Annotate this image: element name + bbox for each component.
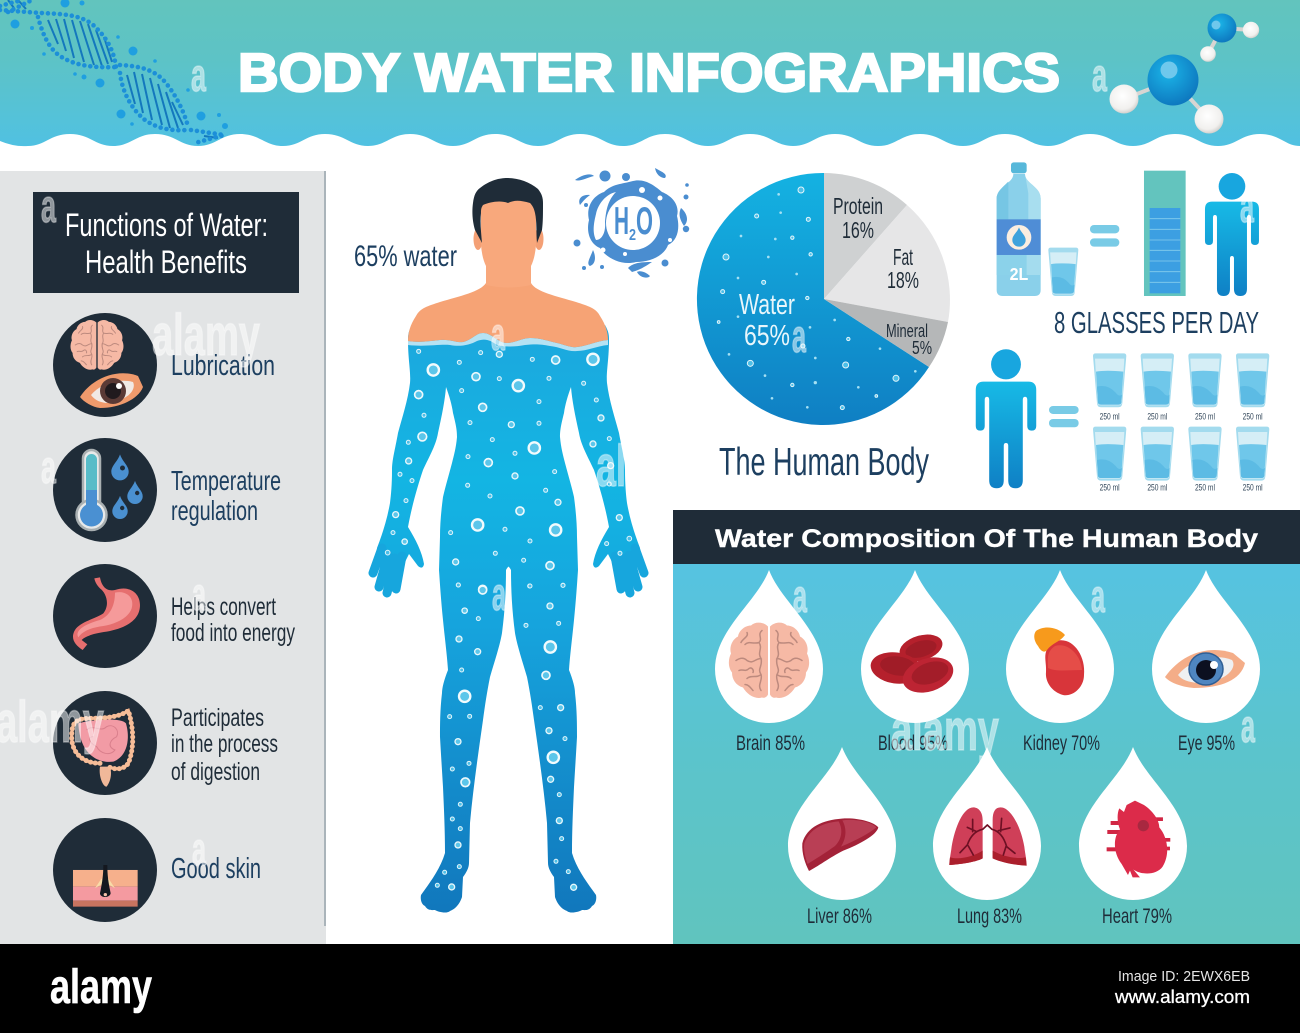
watermarks: a [191, 49, 206, 101]
organ: heart 79% [1079, 747, 1187, 928]
pie labels: Mineral [886, 321, 928, 341]
watermarks: alamy [891, 698, 999, 763]
slice: water [697, 173, 929, 425]
pie labels: Fat [893, 244, 913, 270]
daily water intake section [976, 162, 1269, 493]
header banner [0, 0, 1300, 172]
item: participates in digestion: Participates [171, 704, 264, 732]
watermarks: a [192, 568, 206, 620]
heading: functions of water [33, 192, 299, 293]
glasses grid: 250 ml x 8: 250 ml [1243, 483, 1263, 493]
glasses grid: 250 ml x 8: 250 ml [1243, 411, 1263, 421]
section header [673, 510, 1300, 564]
pie labels: 65% [744, 320, 790, 352]
item: lubrication [53, 313, 275, 417]
heading: functions of water: Health Benefits [85, 244, 247, 280]
icon: water molecule [1110, 14, 1259, 134]
organ: kidney 70% [1006, 570, 1114, 755]
watermarks: a [192, 823, 206, 875]
icon: glass [1048, 248, 1078, 296]
watermarks [0, 49, 1255, 875]
icon: equals sign [1049, 406, 1079, 427]
pie bubbles [717, 187, 917, 410]
icon: H2O splash: 2 [629, 227, 636, 244]
glasses grid: 250 ml x 8: 250 ml [1100, 411, 1120, 421]
icon: H2O splash: H [614, 200, 629, 243]
organ: blood 95%: Blood 95% [878, 732, 948, 755]
slice: protein [824, 173, 907, 299]
watermarks: a [1092, 49, 1107, 101]
organ: liver 86% [788, 747, 896, 928]
organ: brain 85%: Brain 85% [736, 732, 805, 755]
pie labels [739, 193, 932, 358]
slice: fat [824, 205, 950, 322]
watermarks: a [793, 570, 807, 622]
glasses grid: 250 ml x 8: 250 ml [1195, 411, 1215, 421]
glasses grid: 250 ml x 8: 250 ml [1147, 483, 1167, 493]
hair [472, 178, 543, 243]
glasses grid: 250 ml x 8 [1093, 353, 1269, 493]
pie chart: the human body [697, 173, 950, 484]
footer logo: alamy [50, 961, 152, 1014]
water bubbles: legs [435, 583, 577, 890]
panel: water composition of the human body [673, 510, 1300, 944]
pie labels: Protein [833, 193, 883, 219]
organ: eye 95%: Eye 95% [1178, 732, 1235, 755]
footer bar [0, 944, 1300, 1033]
icon: H2O splash: O [636, 200, 653, 243]
human body figure [354, 178, 644, 913]
watermarks: a [491, 308, 505, 360]
footer url: www.alamy.com [1114, 987, 1250, 1007]
organ: kidney 70%: Kidney 70% [1023, 732, 1100, 755]
icon: person [976, 349, 1036, 488]
title: BODY WATER INFOGRAPHICS [238, 43, 1060, 103]
icon: equals sign [1090, 225, 1119, 247]
icon: DNA helix [0, 0, 228, 143]
skin: shoulders and neck [408, 262, 608, 347]
watermarks: a [792, 310, 806, 362]
item: temperature regulation [53, 438, 281, 542]
item: helps convert food into energy: food into energy [171, 619, 295, 647]
glasses grid: 250 ml x 8: 250 ml [1147, 411, 1167, 421]
watermarks: alamy [152, 303, 260, 368]
label: 65% water: 65% water [354, 240, 457, 273]
item: helps convert food into energy: Helps convert [171, 593, 276, 621]
water-filled body silhouette [373, 325, 644, 913]
item: temperature regulation: regulation [171, 495, 258, 526]
pie labels: 16% [842, 217, 874, 243]
item: participates in digestion [53, 691, 278, 795]
glasses grid: 250 ml x 8: 250 ml [1100, 483, 1120, 493]
watermarks: a [1241, 700, 1255, 752]
head [472, 178, 544, 288]
organ: heart 79%: Heart 79% [1102, 905, 1172, 928]
water bubbles: upper body [385, 349, 632, 593]
watermarks: a [41, 441, 56, 493]
section header: Water Composition Of The Human Body [715, 525, 1258, 553]
icon: 2L bottle [997, 162, 1041, 296]
glasses grid: 250 ml x 8: 250 ml [1195, 483, 1215, 493]
organ: liver 86%: Liver 86% [807, 905, 872, 928]
watermarks: al [596, 434, 626, 499]
watermarks: a [41, 180, 56, 232]
organ: lung 83% [933, 747, 1041, 928]
organ: eye 95% [1152, 570, 1260, 755]
watermarks: a [492, 568, 506, 620]
heading: functions of water: Functions of Water: [65, 207, 268, 243]
item: lubrication: Lubrication [171, 350, 275, 382]
item: good skin [53, 818, 261, 922]
pie labels: 5% [912, 338, 932, 358]
watermarks: a [1091, 570, 1105, 622]
item: helps convert food into energy [53, 564, 295, 668]
item: participates in digestion: of digestion [171, 758, 260, 786]
icon: 2L bottle: 2L [1010, 264, 1028, 284]
panel: functions of water [0, 171, 326, 944]
pie labels: 18% [887, 267, 919, 293]
organ: lung 83%: Lung 83% [957, 905, 1022, 928]
organ: blood 95% [861, 570, 969, 755]
icon: person [1205, 173, 1259, 296]
slice: mineral [824, 299, 948, 367]
water surface band [408, 333, 608, 351]
organ: brain 85% [715, 570, 823, 755]
caption: the human body: The Human Body [719, 441, 929, 484]
icon: H2O splash [574, 168, 689, 278]
watermarks: a [1240, 180, 1254, 232]
item: participates in digestion: in the process [171, 730, 278, 758]
footer image id: Image ID: 2EWX6EB [1118, 968, 1250, 985]
pie labels: Water [739, 289, 795, 321]
item: temperature regulation: Temperature [171, 465, 281, 496]
watermarks: alamy [0, 690, 104, 755]
chart: body water column [1144, 171, 1186, 296]
item: good skin: Good skin [171, 853, 261, 885]
